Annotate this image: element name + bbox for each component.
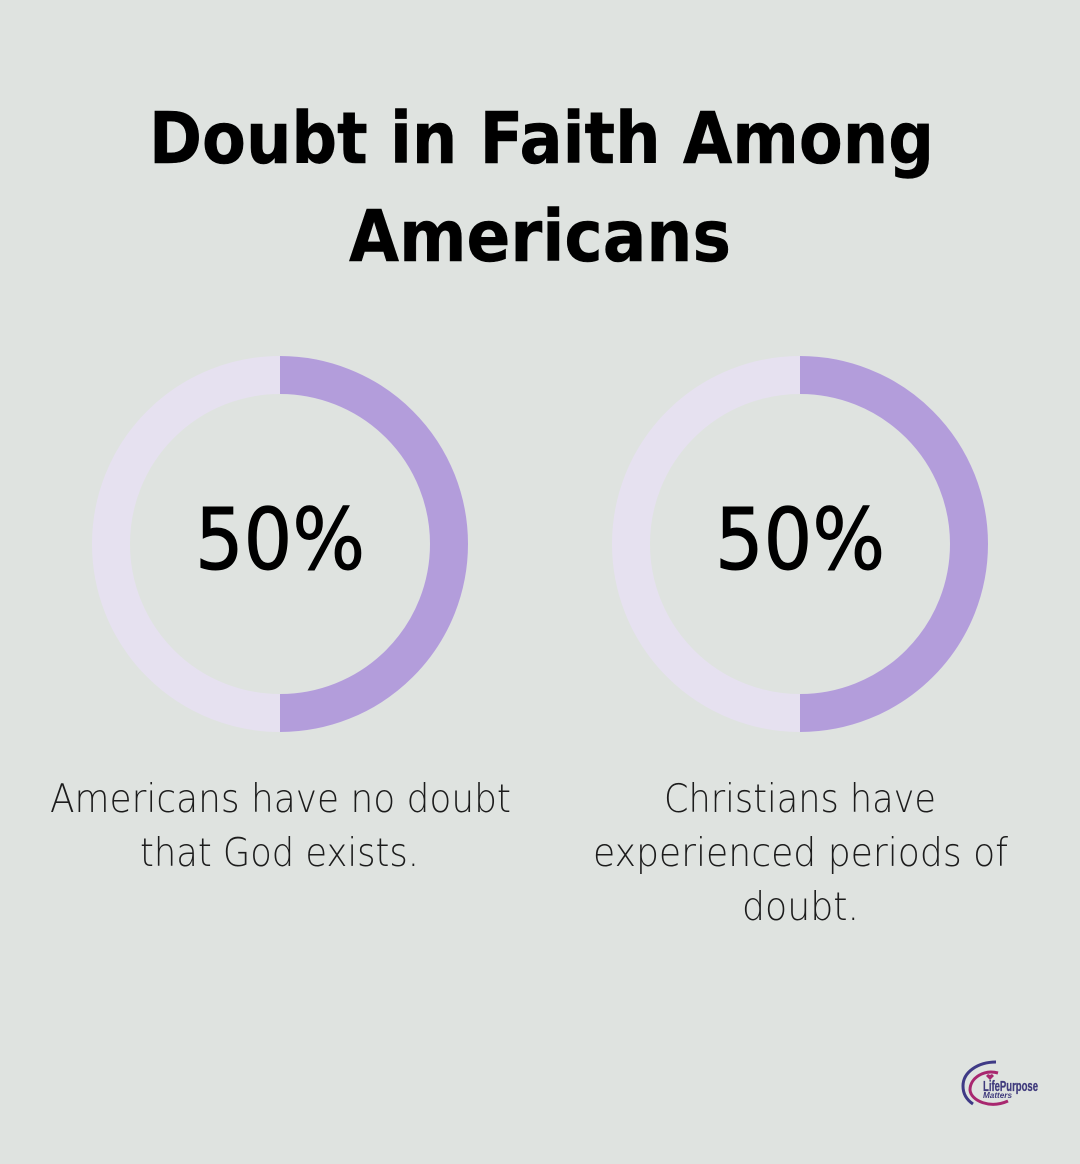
logo: Life Purpose Matters bbox=[963, 1062, 1038, 1104]
description: Christians have bbox=[664, 777, 936, 822]
title: Doubt in Faith Among bbox=[149, 97, 934, 180]
description: that God exists. bbox=[140, 831, 419, 876]
panel: Christians stat bbox=[593, 375, 1008, 930]
description: Americans have no doubt bbox=[50, 777, 511, 822]
description: experienced periods of bbox=[593, 831, 1008, 876]
logo: Life Purpose Matters: Matters bbox=[983, 1091, 1013, 1100]
logo: Life Purpose Matters: LifePurpose bbox=[983, 1078, 1038, 1095]
description bbox=[50, 777, 511, 876]
stat value: 50% bbox=[195, 491, 365, 590]
title bbox=[149, 97, 934, 278]
panel: Americans stat bbox=[50, 375, 511, 876]
description bbox=[593, 777, 1008, 930]
donut chart: 50 percent bbox=[111, 375, 449, 713]
description: doubt. bbox=[742, 885, 859, 930]
stat value: 50% bbox=[715, 491, 885, 590]
donut chart: 50 percent bbox=[631, 375, 969, 713]
title: Americans bbox=[349, 195, 731, 278]
